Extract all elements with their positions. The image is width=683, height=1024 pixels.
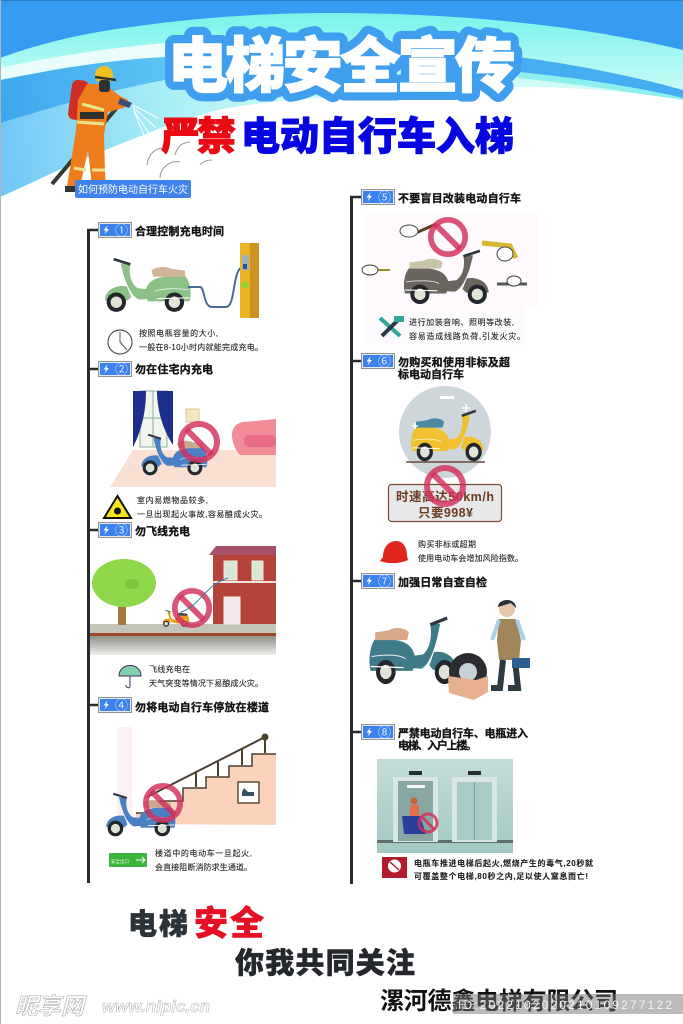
section 6: heading: ⑥ <box>378 351 391 370</box>
footer slogan line 1 <box>128 905 264 943</box>
footer slogan line 2: 你我共同关注 <box>235 947 415 980</box>
icon: firefighter <box>52 66 132 192</box>
label: how to prevent fires: 如何预防电动自行车火灾 <box>78 183 188 196</box>
watermark right <box>453 994 683 1014</box>
section 5: heading: ⑤ <box>378 187 391 206</box>
section 2: heading: ② <box>115 359 128 378</box>
section 4: heading: 勿将电动自行车停放在楼道 <box>135 700 269 714</box>
section 4: exit sign <box>109 853 147 867</box>
section 6: text: 购买非标或超期 <box>418 539 476 549</box>
icon: water spray and smoke <box>133 105 212 178</box>
footer company name: 漯河德鑫电梯有限公司 <box>380 987 618 1015</box>
footer slogan line 1: 电梯 <box>128 908 188 941</box>
section 3: umbrella icon <box>119 666 141 688</box>
section 6: price box: 只要998¥ <box>418 506 473 520</box>
section 8: warning sign <box>382 857 407 878</box>
section 7: scooter and mechanic illustration <box>369 600 530 700</box>
section 6: price box: 时速高达50km/h <box>396 489 494 504</box>
title: 电梯安全宣传 <box>168 33 515 100</box>
section 8: heading: 严禁电动自行车、电瓶进入 <box>398 726 528 740</box>
section 7: heading: 加强日常自查自检 <box>398 575 487 589</box>
section 3: street illustration <box>90 546 276 655</box>
section 3: text <box>149 664 263 688</box>
section 2: text: 一旦出现起火事故,容易酿成火灾。 <box>137 509 267 519</box>
section 8: heading: ⑧ <box>378 722 391 741</box>
left timeline <box>87 229 98 883</box>
section 4: staircase illustration <box>106 727 276 836</box>
watermark left: 昵享网 <box>15 993 87 1019</box>
section 5: tools icon <box>380 316 404 336</box>
footer slogan line 1: 安全 <box>194 905 264 943</box>
section 5: heading: 不要盲目改装电动自行车 <box>398 191 521 205</box>
section 6: heading <box>362 351 510 381</box>
section 8: elevator illustration <box>377 759 513 853</box>
section 3: heading <box>98 520 190 539</box>
section 2: room illustration <box>110 391 276 487</box>
section 1: text: 一般在8-10小时内就能完成充电。 <box>139 342 263 352</box>
subtitle: 严禁 <box>161 116 236 159</box>
section 1: charging scooter illustration <box>105 243 259 318</box>
section 3: heading: 勿飞线充电 <box>135 524 190 538</box>
section 2: fire warning sign <box>104 496 131 518</box>
section 8: text: 可覆盖整个电梯,80秒之内,足以使人窒息而亡! <box>414 871 588 881</box>
section 2: heading: 勿在住宅内充电 <box>135 362 213 376</box>
section 6: yellow scooter illustration <box>399 386 491 478</box>
section 6: price box <box>388 484 502 522</box>
right timeline <box>350 196 361 884</box>
subtitle: 电动自行车入梯 <box>241 116 514 159</box>
section 2: heading <box>98 359 213 378</box>
section 8: text <box>414 858 593 881</box>
section 4: text: 会直接阻断消防求生通道。 <box>155 862 252 872</box>
section 4: exit sign: 安全出口 <box>111 858 129 865</box>
section 1: heading: 合理控制充电时间 <box>135 224 224 238</box>
section 1: text <box>139 328 263 352</box>
section 5: heading <box>362 187 521 206</box>
section 3: text: 飞线充电在 <box>149 664 190 674</box>
section 5: modified scooter illustration <box>362 213 538 345</box>
section 3: heading: ③ <box>115 520 128 539</box>
section 6: text: 使用电动车会增加风险指数。 <box>418 553 523 563</box>
section 4: text <box>155 848 252 872</box>
section 5: text: 容易造成线路负荷,引发火灾。 <box>409 331 525 341</box>
section 8: text: 电瓶车推进电梯后起火,燃烧产生的毒气,20秒就 <box>414 858 593 868</box>
section 4: text: 楼道中的电动车一旦起火, <box>155 848 252 858</box>
section 7: heading <box>362 571 487 590</box>
section 5: text <box>409 317 525 341</box>
watermark right: ID:2022102020210109277122 <box>458 998 672 1012</box>
watermark left <box>15 993 210 1019</box>
section 5: text: 进行加装音响、照明等改装, <box>409 317 514 327</box>
section 3: text: 天气突变等情况下易酿成火灾。 <box>149 678 263 688</box>
section 1: heading: ① <box>115 220 128 239</box>
section 1: text: 按照电瓶容量的大小, <box>139 328 218 338</box>
section 8: heading <box>362 722 528 752</box>
watermark left: www.nipic.cn <box>102 997 210 1016</box>
section 2: text <box>137 495 267 519</box>
section 1: clock icon <box>108 330 132 354</box>
section 6: prohibited sign <box>427 468 463 504</box>
section 1: heading <box>98 220 224 239</box>
section 2: text: 室内易燃物品较多, <box>137 495 208 505</box>
section 4: heading: ④ <box>115 695 128 714</box>
section 6: text <box>418 539 523 563</box>
section 6: helmet icon <box>380 541 408 563</box>
section 8: heading: 电梯、入户上楼。 <box>398 738 477 752</box>
label: how to prevent fires <box>75 180 191 198</box>
title: 电梯安全宣传 <box>168 33 515 100</box>
section 6: heading: 标电动自行车 <box>398 367 464 381</box>
section 4: heading <box>98 695 269 714</box>
section 6: heading: 勿购买和使用非标及超 <box>398 355 510 369</box>
section 7: heading: ⑦ <box>378 571 391 590</box>
